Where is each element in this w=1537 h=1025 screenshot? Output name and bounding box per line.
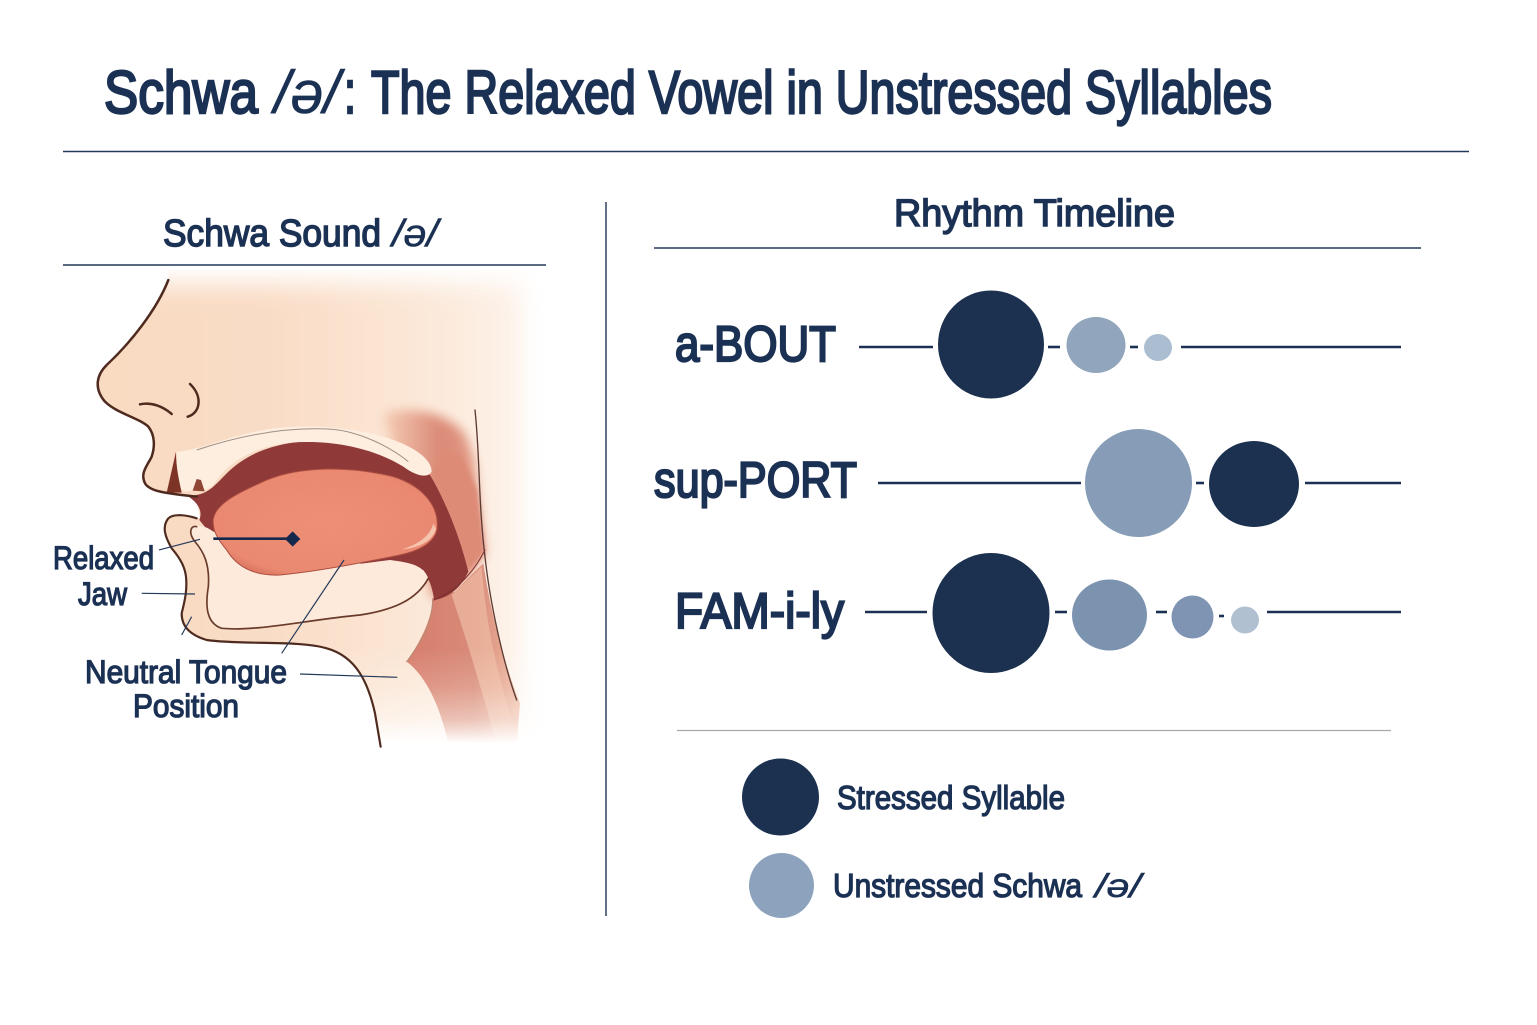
legend item: stressed — [742, 758, 1065, 836]
palate line — [197, 429, 408, 462]
heading: rhythm timeline: Rhythm Timeline — [894, 193, 1175, 235]
title: /ə/ — [270, 59, 345, 126]
label: neutral tongue position — [85, 654, 287, 724]
title: Schwa — [104, 59, 259, 126]
row: FAM-i-ly — [675, 553, 1401, 673]
title: The Relaxed Vowel in Unstressed Syllables — [371, 59, 1272, 126]
label: relaxed jaw: Jaw — [78, 576, 128, 612]
legend — [742, 758, 1145, 918]
label: neutral tongue position: Position — [133, 688, 239, 724]
legend item: unstressed: Unstressed Schwa — [833, 867, 1083, 904]
mouth cavity — [187, 441, 468, 600]
row: sup-PORT: sup-PORT — [654, 452, 857, 508]
face and jaw outlines — [98, 280, 517, 747]
title — [104, 59, 1272, 126]
pointer: tongue position — [213, 531, 300, 547]
heading: schwa sound: Schwa Sound — [163, 213, 381, 255]
palate and upper teeth — [177, 426, 432, 491]
legend item: unstressed: /ə/ — [1092, 867, 1145, 904]
panel: schwa sound — [54, 218, 546, 748]
tongue — [213, 469, 437, 575]
upper throat — [383, 410, 485, 600]
label: relaxed jaw: Relaxed — [53, 540, 154, 576]
legend item: stressed: Stressed Syllable — [837, 779, 1065, 816]
title: : — [344, 59, 356, 126]
row: a-BOUT — [675, 290, 1401, 398]
row: a-BOUT: a-BOUT — [675, 316, 836, 372]
row: sup-PORT — [654, 429, 1401, 537]
label: neutral tongue position: Neutral Tongue — [85, 654, 287, 690]
heading: schwa sound: /ə/ — [389, 213, 442, 255]
row: FAM-i-ly: FAM-i-ly — [675, 583, 844, 639]
legend item: unstressed — [749, 853, 1145, 918]
label: relaxed jaw — [53, 540, 154, 612]
lower throat — [407, 563, 520, 743]
lower jaw floor — [190, 526, 428, 630]
mouth anatomy diagram — [96, 270, 526, 748]
leader lines — [142, 539, 397, 677]
panel: rhythm timeline — [654, 193, 1421, 918]
